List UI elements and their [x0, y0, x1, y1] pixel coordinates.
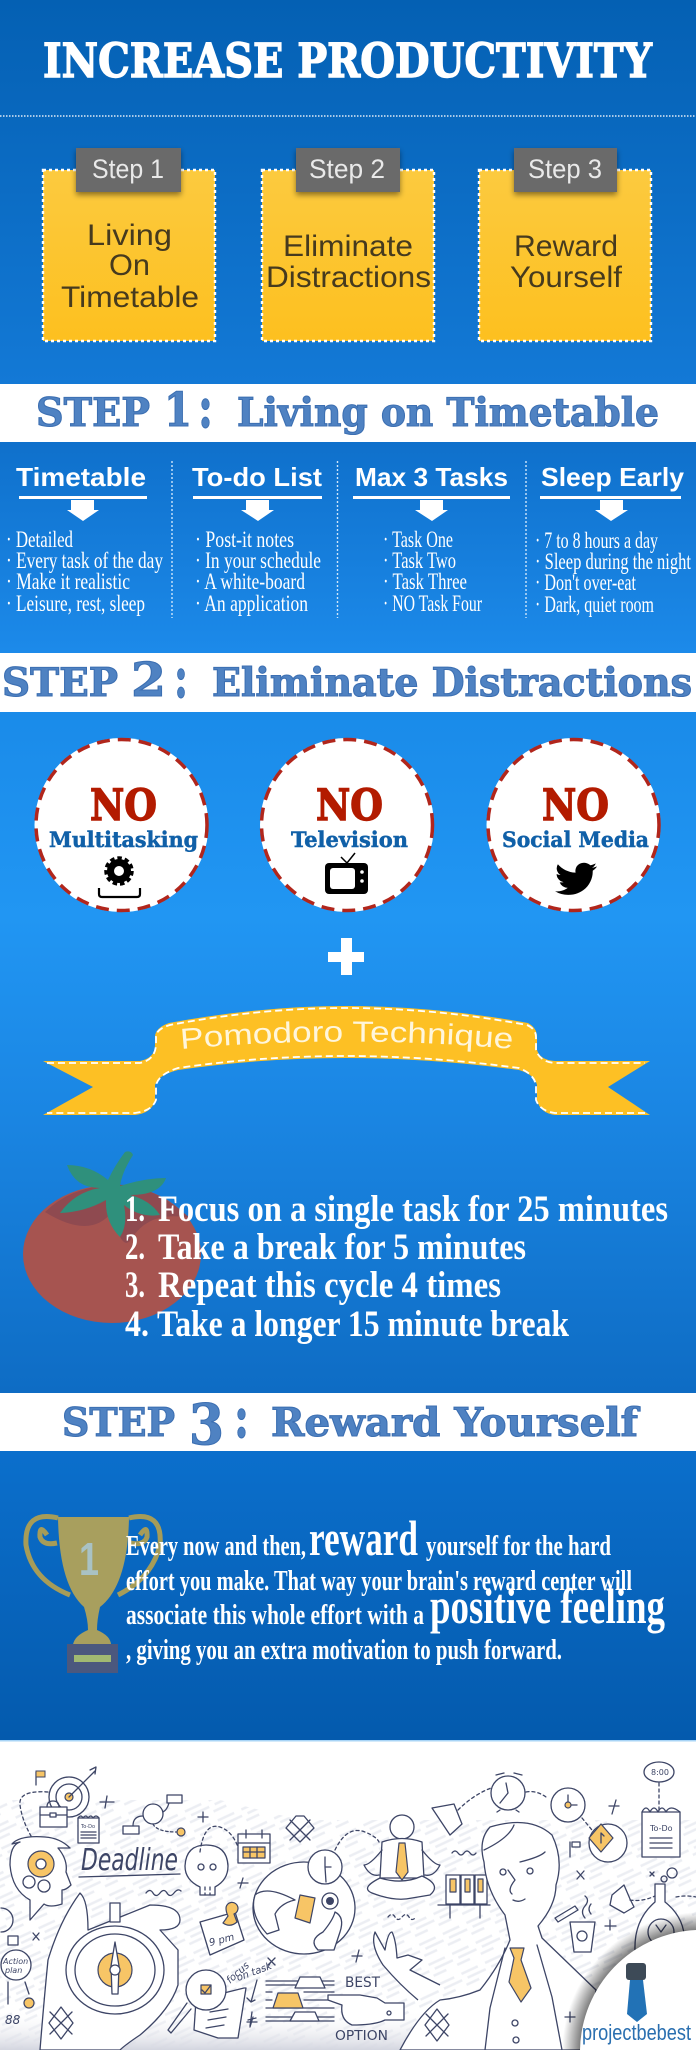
doodle: action plan bubble: Action	[2, 1957, 28, 1966]
heading: step 3: 3	[189, 1392, 224, 1458]
doodle: magnifier and checklist: on task	[235, 1961, 275, 1984]
doodle: binders and shelf	[438, 1851, 490, 1918]
heading: step 1: Living on Timetable	[237, 390, 659, 436]
badge: no multitasking	[34, 738, 208, 912]
doodle: target and flag	[20, 1767, 96, 1836]
arrow	[415, 500, 448, 521]
doodle: deadline lettering	[79, 1843, 181, 1896]
doodle: alarm clock and hourglass	[432, 1773, 597, 1836]
step 3 card text	[510, 230, 623, 294]
heading: step 2	[0, 643, 696, 712]
doodle: magnifier and checklist: focus	[225, 1960, 252, 1986]
badge: no television	[260, 738, 434, 912]
pomodoro steps list: Repeat this cycle 4 times	[158, 1265, 501, 1306]
step 2 tag	[296, 148, 400, 192]
heading: step 2: 2	[131, 653, 166, 708]
doodle: action plan bubble: plan	[4, 1966, 22, 1975]
list	[6, 527, 163, 616]
doodle: head with gears	[10, 1837, 71, 1920]
column: sleep early: Sleep Early	[541, 462, 685, 492]
doodle: x and slash marks	[238, 1878, 575, 2027]
panel: step 3 card	[479, 148, 651, 341]
ribbon: pomodoro technique	[43, 1006, 650, 1115]
pomodoro steps list: Take a longer 15 minute break	[157, 1304, 569, 1345]
step 1 tag	[76, 148, 181, 192]
list: · Every task of the day	[6, 548, 163, 573]
doodle: notepad to-do: To-Do	[80, 1824, 95, 1830]
doodle: node diagram	[100, 1795, 208, 1836]
column: to-do list: To-do List	[192, 462, 322, 492]
list: · Don't over-eat	[535, 570, 636, 595]
badge: no multitasking: NO	[90, 781, 157, 831]
logo: projectbebest corner	[562, 1912, 696, 2050]
pomodoro steps list: Take a break for 5 minutes	[158, 1227, 526, 1268]
icon: trophy: 1	[79, 1533, 99, 1585]
doodle: magnifier and checklist	[168, 1958, 275, 2038]
reward paragraph: reward	[309, 1510, 418, 1566]
panel: doodle illustration	[0, 1740, 696, 2050]
step 3 card text: Reward	[514, 230, 618, 263]
heading: step 1: STEP	[36, 390, 150, 436]
doodle: signpost globe	[570, 1800, 627, 1879]
icon: twitter bird	[555, 863, 597, 895]
list	[383, 527, 482, 616]
reward paragraph	[126, 1510, 665, 1666]
panel: step 2 card	[262, 148, 434, 341]
panel: header background	[0, 0, 696, 384]
doodle: action plan bubble	[1, 1908, 39, 2027]
panel: step 2 background	[0, 712, 696, 1393]
ribbon: pomodoro technique: Pomodoro Technique	[182, 1021, 512, 1052]
doodle: file tabs with best option	[266, 1975, 404, 2044]
doodle: deadline lettering: Deadline	[81, 1843, 178, 1878]
list: · Make it realistic	[6, 569, 130, 594]
list: · Task One	[383, 527, 453, 552]
arrow	[241, 500, 274, 521]
pomodoro steps list: 1.	[125, 1189, 145, 1230]
list: · An application	[195, 591, 308, 616]
doodle: speech bubble and to-do list	[642, 1762, 680, 1857]
step 1 card text: Living	[87, 219, 172, 252]
arrow	[595, 500, 628, 521]
arrow	[67, 500, 99, 521]
list: · Task Three	[383, 569, 467, 594]
badge: no social media	[486, 738, 660, 912]
icon: trophy	[26, 1517, 160, 1673]
step 2 card text	[266, 230, 431, 294]
panel: step 1 content	[0, 442, 696, 653]
heading: step 2: :	[174, 643, 188, 711]
list	[195, 527, 321, 616]
pomodoro steps list	[125, 1189, 668, 1345]
icon: fist and tie	[626, 1963, 647, 2022]
reward paragraph: Every now and then,	[126, 1531, 306, 1562]
doodle: speech bubble and to-do list: 8:00	[651, 1768, 669, 1777]
icon: plus	[328, 938, 364, 975]
reward paragraph: associate this whole effort with a	[126, 1600, 424, 1631]
heading: step 3: :	[234, 1383, 249, 1451]
step 2 card text: Distractions	[266, 261, 431, 294]
reward paragraph: yourself for the hard	[426, 1531, 611, 1562]
badge: no social media: Social Media	[502, 827, 649, 852]
doodle: calendar	[238, 1830, 270, 1863]
doodle: file tabs with best option: BEST	[345, 1975, 380, 1991]
doodle: wall clock	[551, 1788, 585, 1822]
list: · Task Two	[383, 548, 456, 573]
panel: step 1 card	[43, 148, 215, 341]
column: to-do list	[192, 462, 322, 616]
step 3 tag	[514, 148, 617, 192]
step 1 card text: Timetable	[61, 281, 199, 314]
list: · NO Task Four	[383, 591, 482, 616]
list: · Post-it notes	[195, 527, 294, 552]
pomodoro steps list: 2.	[125, 1227, 145, 1268]
heading: step 1: :	[198, 373, 213, 441]
heading: step 3: Reward Yourself	[271, 1400, 640, 1446]
doodle: knots	[49, 2007, 449, 2041]
list: · In your schedule	[195, 548, 321, 573]
doodle: knot	[286, 1816, 314, 1842]
doodle: big man	[374, 1822, 596, 2050]
heading: step 3	[0, 1383, 696, 1458]
column: max 3 tasks	[353, 462, 510, 616]
doodle: flask with clock	[610, 1868, 696, 1950]
doodle: note 9 pm: 9 pm	[208, 1932, 236, 1949]
step 3 card text: Yourself	[510, 261, 623, 294]
step 1 card text: On	[109, 249, 150, 282]
icon: tv	[325, 853, 368, 894]
list: · A white-board	[195, 569, 305, 594]
heading: step 2: STEP	[2, 660, 118, 706]
badge: no social media: NO	[542, 781, 609, 831]
pomodoro steps list: 4.	[125, 1304, 149, 1345]
doodle: speech bubble and to-do list: To-Do	[649, 1824, 673, 1833]
step 3 tag: Step 3	[528, 154, 602, 184]
heading: step 2: Eliminate Distractions	[212, 660, 692, 706]
list: · Leisure, rest, sleep	[6, 591, 145, 616]
heading: step 1	[0, 373, 696, 442]
icon: gear and tray	[99, 858, 140, 897]
list: · Detailed	[6, 527, 73, 552]
doodle: note 9 pm	[200, 1902, 244, 1955]
step 2 tag: Step 2	[309, 154, 385, 184]
doodle: action plan bubble: 88	[5, 2013, 21, 2027]
doodle: file tabs with best option: OPTION	[335, 2029, 388, 2044]
list	[535, 528, 691, 617]
doodle: briefcase	[40, 1801, 67, 1827]
doodle: big circle with clock	[253, 1850, 355, 1954]
column: timetable: Timetable	[16, 462, 146, 492]
doodle: meditating man	[335, 1815, 440, 1920]
icon: tomato	[23, 1151, 201, 1323]
column: max 3 tasks: Max 3 Tasks	[355, 462, 508, 492]
badge: no television: NO	[316, 781, 383, 831]
step 2 card text: Eliminate	[283, 230, 413, 263]
panel: step 3 background	[0, 1451, 696, 1740]
badge: no multitasking: Multitasking	[49, 827, 198, 852]
badge: no television: Television	[291, 827, 408, 852]
heading: step 3: STEP	[62, 1400, 175, 1446]
doodle: stopwatch	[40, 1893, 180, 2050]
pomodoro steps list: 3.	[125, 1265, 145, 1306]
doodle: coffee cup	[555, 1896, 616, 1952]
reward paragraph: , giving you an extra motivation to push forward.	[126, 1635, 562, 1666]
column: timetable	[6, 462, 163, 616]
step 1 card text	[61, 219, 199, 314]
column: sleep early	[535, 462, 691, 617]
step 1 tag: Step 1	[92, 154, 164, 184]
doodle: notepad to-do	[78, 1816, 99, 1843]
doodle: lightbulb	[185, 1826, 238, 1895]
heading: step 1: 1	[164, 383, 192, 438]
